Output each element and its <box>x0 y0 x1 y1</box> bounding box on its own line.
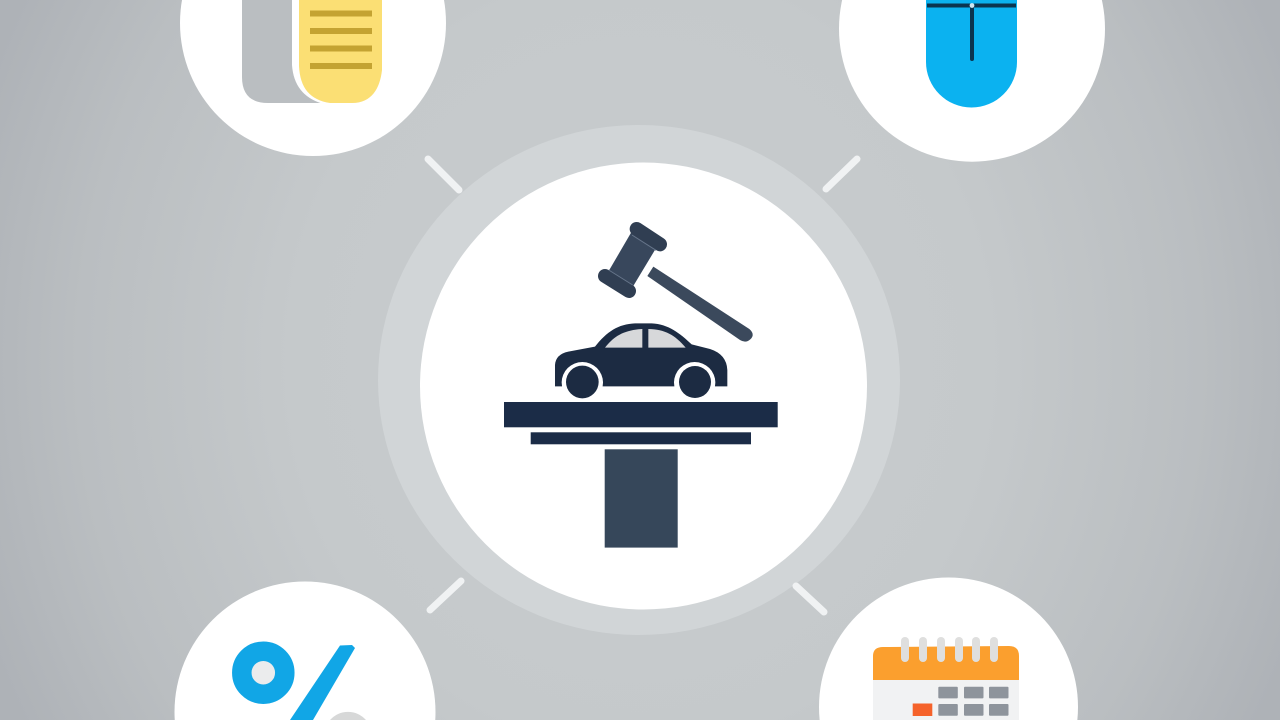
white disc <box>839 0 1105 162</box>
car front window <box>648 329 686 348</box>
document lines <box>310 10 372 69</box>
highlighted date <box>913 704 932 716</box>
rear wheel <box>566 366 599 398</box>
car rear window <box>605 329 642 348</box>
pedestal <box>605 449 678 548</box>
panel: percent <box>174 582 436 720</box>
gavel upper cap <box>637 229 660 244</box>
mouse body <box>926 0 1017 108</box>
document yellow sheet <box>299 0 382 103</box>
line 3 <box>310 46 372 52</box>
table top <box>504 402 778 427</box>
ring 2 <box>919 637 927 662</box>
white disc <box>174 582 436 720</box>
car body <box>555 323 727 386</box>
tick: bottom left <box>430 581 461 610</box>
line 2 <box>310 28 372 34</box>
mouse centre line <box>970 6 974 61</box>
tick: bottom right <box>796 586 824 612</box>
gavel head <box>608 232 656 287</box>
icon: car <box>552 323 732 403</box>
line 4 <box>310 63 372 69</box>
gavel lower cap <box>605 276 629 291</box>
gavel lower seam <box>609 270 633 285</box>
calendar binding rings <box>901 637 998 662</box>
cell row 2 col 3 <box>989 704 1008 716</box>
calendar page <box>873 678 1019 720</box>
tick: top left <box>428 159 459 190</box>
front wheel arch <box>674 362 715 403</box>
connector ticks <box>428 159 857 612</box>
cell row 1 col 3 <box>989 687 1008 698</box>
panel: document <box>180 0 446 156</box>
ring 5 <box>972 637 980 662</box>
arch floor mask <box>552 387 732 401</box>
white disc <box>819 578 1078 720</box>
document white edge <box>292 0 345 104</box>
cell row 2 col 1 <box>938 704 958 716</box>
percent slash <box>290 645 355 720</box>
central white disc <box>420 162 867 610</box>
cell row 1 col 2 <box>964 687 984 698</box>
ring 3 <box>937 637 945 662</box>
central emblem <box>378 125 900 635</box>
ring 1 <box>901 637 909 662</box>
percent ring <box>242 651 285 694</box>
rear wheel arch <box>562 362 603 403</box>
line 1 <box>310 10 372 16</box>
panel: calendar <box>819 578 1078 720</box>
mouse button divider <box>927 4 1016 8</box>
document back sheet <box>242 0 325 103</box>
icon: gavel <box>605 229 753 342</box>
ring 4 <box>955 637 963 662</box>
ring 6 <box>990 637 998 662</box>
table under-bar <box>531 432 751 444</box>
gavel handle <box>647 267 753 342</box>
white disc <box>180 0 446 156</box>
calendar date cells <box>938 687 1008 716</box>
tick: top right <box>826 159 857 189</box>
front wheel <box>679 366 711 398</box>
gavel upper seam <box>632 235 656 250</box>
calendar header <box>873 646 1019 680</box>
cell row 1 col 1 <box>938 687 958 698</box>
panel: mouse <box>839 0 1105 162</box>
cell row 2 col 2 <box>964 704 984 716</box>
percent lower ring <box>330 712 366 720</box>
mouse scroll dot <box>970 3 974 8</box>
outer halo ring <box>378 125 900 635</box>
